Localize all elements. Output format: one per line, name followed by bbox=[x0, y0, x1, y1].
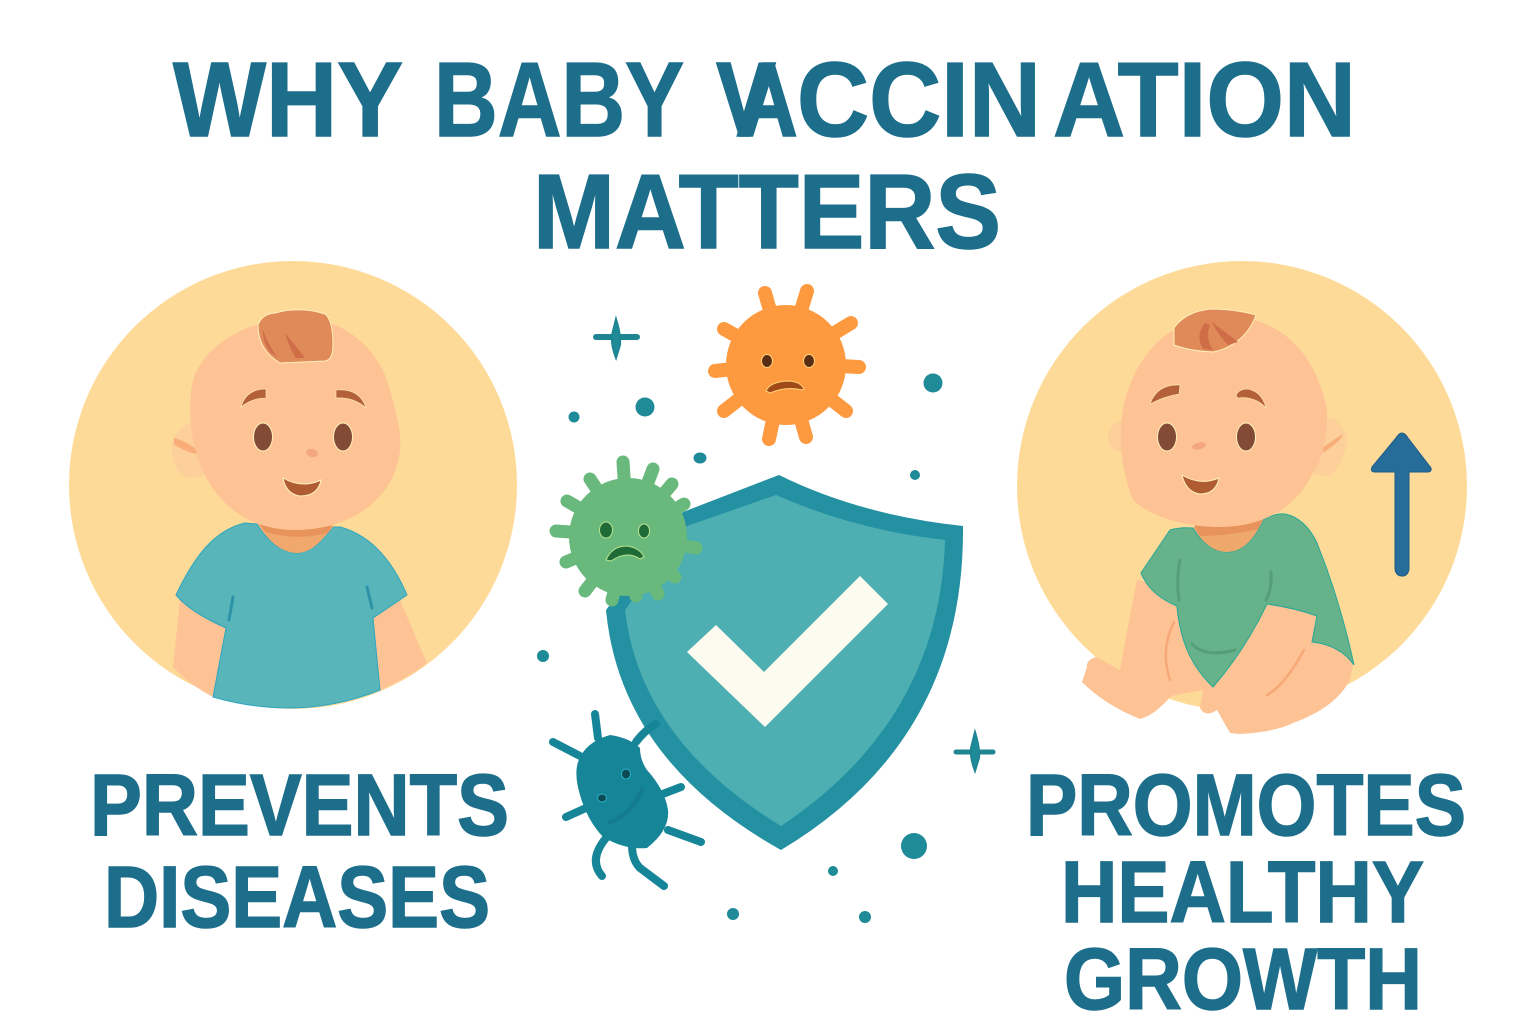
icon: shield bbox=[606, 475, 963, 850]
title: MATTERS bbox=[533, 153, 1001, 271]
left ear bbox=[172, 420, 206, 477]
left head bbox=[190, 318, 400, 530]
title: V bbox=[716, 41, 776, 159]
right neck shadow bbox=[1194, 518, 1263, 536]
left eyes bbox=[254, 423, 352, 451]
left hair strands bbox=[263, 330, 305, 358]
left mouth bbox=[283, 478, 321, 496]
right ear inner bbox=[1313, 434, 1343, 458]
panel: left baby bbox=[69, 261, 517, 709]
left hair bbox=[258, 310, 333, 363]
icon: green virus bbox=[556, 462, 696, 600]
right head bbox=[1121, 315, 1327, 527]
title: BABY bbox=[434, 41, 684, 159]
left shirt folds bbox=[229, 587, 372, 620]
left neck shadow bbox=[258, 522, 333, 537]
heading: promotes healthy growth: HEALTHY bbox=[1061, 844, 1424, 941]
arrow: growth up bbox=[1371, 433, 1431, 576]
decorative sparkles and dots bbox=[537, 319, 993, 923]
right mouth bbox=[1182, 475, 1219, 494]
right hair strands bbox=[1199, 322, 1238, 350]
right baby body bbox=[1082, 580, 1354, 734]
title: WHY bbox=[173, 41, 403, 159]
title bbox=[173, 41, 1356, 271]
left shirt bbox=[176, 523, 407, 708]
left arms bbox=[173, 600, 427, 697]
left nose bbox=[305, 448, 319, 458]
right eyebrows bbox=[1150, 385, 1266, 408]
right onesie bbox=[1141, 514, 1354, 687]
right nose bbox=[1191, 441, 1207, 451]
green virus eyes bbox=[600, 522, 650, 538]
right eyes bbox=[1158, 423, 1256, 451]
orange virus mouth bbox=[766, 381, 804, 393]
germ eyes bbox=[598, 769, 630, 802]
right onesie folds bbox=[1178, 560, 1271, 653]
title: A bbox=[735, 41, 798, 159]
left neck bbox=[258, 518, 333, 553]
heading: prevents diseases: PREVENTS bbox=[90, 757, 509, 854]
title: ATION bbox=[1053, 41, 1356, 159]
heading: prevents diseases bbox=[90, 757, 509, 946]
right neck bbox=[1194, 515, 1263, 552]
left ear inner bbox=[174, 438, 202, 455]
green virus mouth bbox=[606, 546, 644, 561]
heading: promotes healthy growth: PROMOTES bbox=[1026, 757, 1466, 854]
germ mouth mark bbox=[610, 790, 642, 822]
icon: teal germ bbox=[553, 714, 701, 886]
heading: prevents diseases: DISEASES bbox=[104, 849, 490, 946]
right ears bbox=[1108, 418, 1347, 476]
icon: left circle background bbox=[69, 261, 517, 709]
icon: orange virus bbox=[715, 291, 859, 439]
orange virus eyes bbox=[762, 354, 814, 368]
heading: promotes healthy growth bbox=[1026, 757, 1466, 1024]
icon: right circle background bbox=[1017, 261, 1467, 711]
right hair bbox=[1174, 309, 1256, 352]
left eyebrows bbox=[241, 389, 366, 408]
panel: right baby bbox=[1017, 261, 1467, 734]
icon: check mark bbox=[687, 576, 888, 727]
title: CCIN bbox=[797, 41, 1041, 159]
right body creases bbox=[1166, 622, 1304, 695]
